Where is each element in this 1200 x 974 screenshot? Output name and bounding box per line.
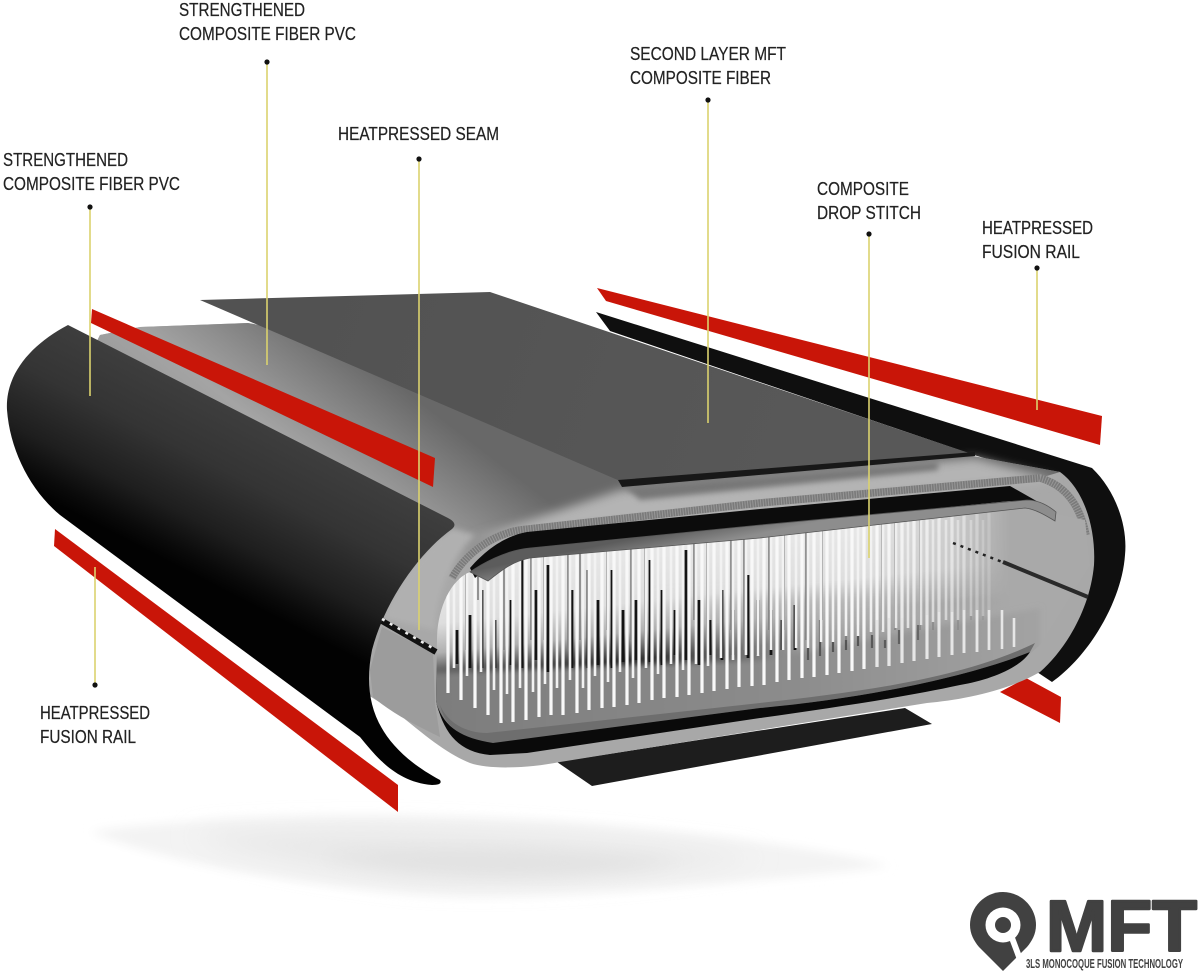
front row white threads: [448, 500, 989, 723]
callout: strengthened composite fiber PVC (left): [3, 149, 180, 396]
callout: heatpressed fusion rail (left): FUSION RAIL: [40, 726, 136, 747]
callout: strengthened composite fiber PVC (top): [179, 0, 356, 365]
callout: heatpressed seam: HEATPRESSED SEAM: [338, 123, 499, 144]
callout: second layer MFT composite fiber: COMPOSITE FIBER: [630, 67, 771, 88]
callout: second layer MFT composite fiber: SECOND LAYER MFT: [630, 43, 786, 64]
heat pressed seam: [382, 619, 436, 652]
callout: heatpressed fusion rail (left): [40, 567, 150, 747]
callout: composite drop stitch: [817, 178, 921, 558]
callout: heatpressed fusion rail (left): HEATPRESSED: [40, 702, 150, 723]
fading dark threads on the right: [808, 620, 918, 660]
inner black layer: bottom: [437, 652, 1030, 755]
callout: strengthened composite fiber PVC (left): STRENGTHENED: [3, 149, 128, 170]
inner black layer: top: [470, 486, 1040, 578]
inner grey skin: top: [470, 500, 1056, 581]
light band near front edge: [470, 458, 1056, 540]
second layer MFT sheet: [200, 292, 975, 487]
black outer shell: left side: [7, 325, 454, 785]
red rail: lower right: [1000, 678, 1061, 723]
logo: MFT: MFT: [1046, 887, 1197, 967]
soft shadow under sheet front edge: [625, 462, 938, 500]
black outer shell: right side: [596, 312, 1125, 682]
callout: strengthened composite fiber PVC (left): COMPOSITE FIBER PVC: [3, 173, 180, 194]
callout: strengthened composite fiber PVC (top): COMPOSITE FIBER PVC: [179, 23, 356, 44]
red rail: upper left: [91, 309, 435, 487]
red rail: lower left: [54, 529, 398, 812]
drop stitch cavity: [436, 512, 1087, 743]
callout: composite drop stitch: DROP STITCH: [817, 202, 921, 223]
dark stitch threads: [448, 500, 989, 723]
lower left grey flap: [370, 627, 440, 737]
cavity back wall: [1077, 518, 1087, 536]
black bottom strip: [557, 708, 932, 786]
back row white threads: [454, 520, 983, 694]
needle field backdrop: [436, 512, 996, 743]
side seam line on inner wall: [953, 543, 1088, 597]
logo: MFT: [970, 887, 1197, 971]
highlight above seam: [384, 528, 475, 630]
callout: composite drop stitch: COMPOSITE: [817, 178, 909, 199]
red rail: upper right: [597, 288, 1102, 445]
callout: heatpressed seam: [338, 123, 499, 630]
inner floor lip: [440, 643, 1035, 743]
top deck shading: [95, 323, 1060, 578]
textured composite fiber band: [452, 478, 1086, 578]
ground shadow: [90, 817, 890, 896]
callout: heatpressed fusion rail (right): FUSION RAIL: [982, 241, 1080, 262]
front row thread tips on the right: [877, 610, 1014, 667]
thin grey threads: [466, 520, 983, 650]
board body: grey outer layer: [95, 323, 1094, 767]
cavity floor: [436, 618, 1014, 743]
callout: heatpressed fusion rail (right): HEATPRESSED: [982, 217, 1093, 238]
callout: second layer MFT composite fiber: [630, 43, 786, 423]
icon: map pin: [970, 892, 1036, 971]
callout: heatpressed fusion rail (right): [982, 217, 1093, 410]
